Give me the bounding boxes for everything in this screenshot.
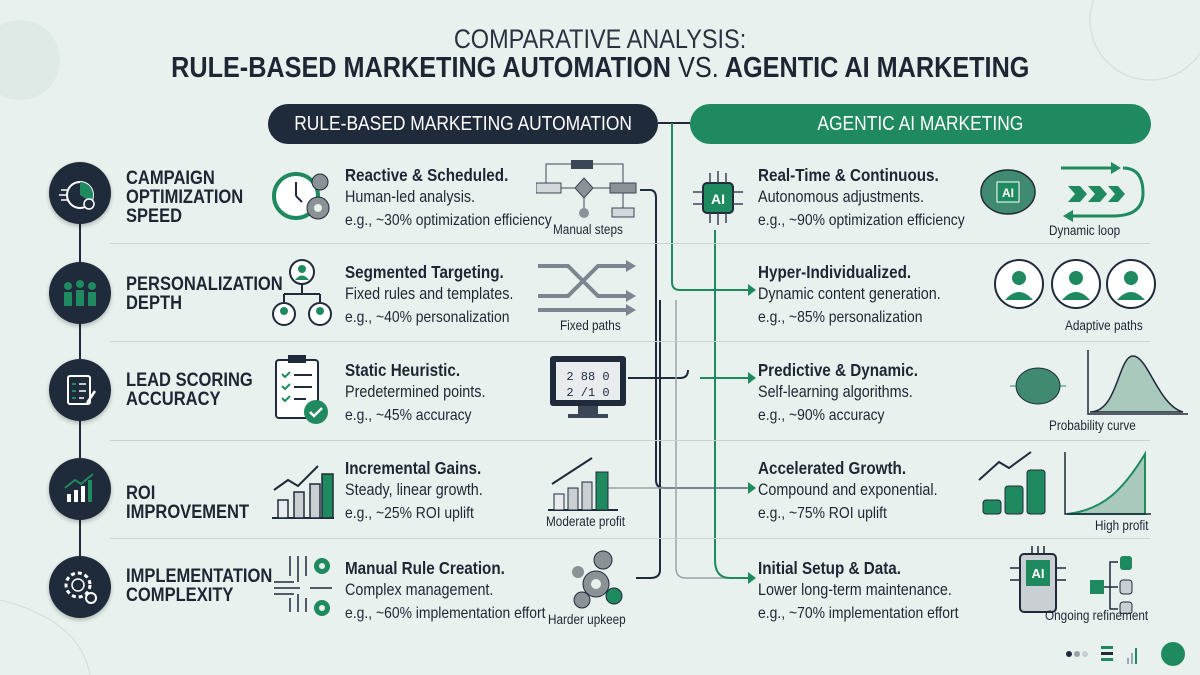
text: agentic	[758, 262, 941, 326]
icon: dynamic loop: Dynamic loop	[1049, 223, 1120, 238]
icon: gear circle	[49, 556, 111, 618]
text: agentic: Lower long-term maintenance.	[758, 581, 952, 599]
text: agentic: Dynamic content generation.	[758, 285, 941, 303]
text: rule-based: Reactive & Scheduled.	[345, 165, 508, 185]
icon: checklist	[275, 355, 328, 424]
text: agentic	[758, 558, 959, 622]
text: rule-based: e.g., ~25% ROI uplift	[345, 505, 474, 522]
text: agentic: e.g., ~70% implementation effort	[758, 605, 959, 622]
text: rule-based: e.g., ~40% personalization	[345, 309, 509, 326]
text: rule-based	[345, 165, 552, 229]
row 4: ROI improvement	[46, 450, 1151, 533]
label	[126, 370, 253, 410]
icon: fixed paths	[538, 260, 636, 333]
icon: adaptive paths	[994, 259, 1156, 333]
label: ROI	[126, 483, 155, 504]
text: rule-based: Complex management.	[345, 581, 493, 599]
icon: fixed paths: Fixed paths	[560, 318, 621, 333]
icon: clipboard circle	[49, 359, 111, 421]
text: rule-based: Static Heuristic.	[345, 360, 460, 380]
text: agentic	[758, 360, 918, 424]
label: ACCURACY	[126, 389, 221, 410]
icon: AI chip	[693, 171, 743, 225]
text: agentic: e.g., ~90% accuracy	[758, 407, 885, 424]
text: agentic: Predictive & Dynamic.	[758, 360, 918, 380]
row 3: lead scoring accuracy	[46, 350, 1188, 433]
icon: stopwatch circle	[49, 162, 111, 224]
text: rule-based: e.g., ~60% implementation effort	[345, 605, 546, 622]
text: agentic: e.g., ~90% optimization efficiency	[758, 212, 965, 229]
header: rule-based	[268, 104, 658, 144]
label: IMPROVEMENT	[126, 502, 249, 523]
title: COMPARATIVE ANALYSIS:	[454, 24, 746, 54]
text: rule-based	[345, 262, 513, 326]
icon: growth chart circle	[49, 458, 111, 520]
icon: AI machine + refinement: AI	[1032, 566, 1044, 581]
label: SPEED	[126, 206, 182, 227]
label	[126, 483, 249, 523]
text: agentic	[758, 165, 965, 229]
text: rule-based: Incremental Gains.	[345, 458, 481, 478]
icon: clock gears	[272, 172, 330, 220]
text: agentic: Self-learning algorithms.	[758, 383, 913, 401]
row 2: personalization depth	[46, 259, 1156, 333]
icon: circuit gears	[274, 556, 332, 616]
icon: dynamic loop	[980, 162, 1144, 238]
icon: monitor: 2 /1 0	[566, 386, 610, 400]
label: LEAD SCORING	[126, 370, 253, 391]
text: rule-based	[345, 558, 546, 622]
text: agentic: Compound and exponential.	[758, 481, 938, 499]
icon: flowchart	[536, 160, 636, 237]
label: CAMPAIGN	[126, 168, 215, 189]
icon: AI machine + refinement: Ongoing refinement	[1045, 608, 1148, 623]
text: rule-based: Steady, linear growth.	[345, 481, 483, 499]
text: rule-based: e.g., ~30% optimization efficiency	[345, 212, 552, 229]
text: rule-based: Predetermined points.	[345, 383, 485, 401]
text: agentic: e.g., ~75% ROI uplift	[758, 505, 887, 522]
text: agentic: Real-Time & Continuous.	[758, 165, 939, 185]
row 5: implementation complexity	[46, 546, 1148, 627]
text: rule-based: Manual Rule Creation.	[345, 558, 505, 578]
icon: bar growth	[272, 465, 334, 519]
icon: probability curve: Probability curve	[1049, 418, 1136, 433]
icon: probability curve	[1010, 350, 1188, 433]
label: PERSONALIZATION	[126, 274, 283, 295]
label: COMPLEXITY	[126, 585, 233, 606]
text: rule-based: Fixed rules and templates.	[345, 285, 513, 303]
text: agentic	[758, 458, 938, 522]
text: agentic: Accelerated Growth.	[758, 458, 906, 478]
icon: high profit: High profit	[1095, 518, 1149, 533]
text: agentic: e.g., ~85% personalization	[758, 309, 922, 326]
text: agentic: Initial Setup & Data.	[758, 558, 901, 578]
icon: monitor: 2 88 0	[566, 370, 610, 384]
icon: AI chip: AI	[711, 191, 725, 207]
label: DEPTH	[126, 293, 182, 314]
title: RULE-BASED MARKETING AUTOMATION VS. AGENTIC AI MARKETING	[171, 52, 1029, 84]
text: rule-based: Human-led analysis.	[345, 188, 475, 206]
label: IMPLEMENTATION	[126, 566, 272, 587]
footer icons	[1066, 642, 1185, 666]
text: agentic: Hyper-Individualized.	[758, 262, 911, 282]
label	[126, 168, 243, 227]
icon: high profit	[978, 450, 1151, 533]
title	[171, 24, 1029, 84]
icon: monitor	[550, 356, 626, 418]
icon: gears	[548, 550, 626, 627]
text: agentic: Autonomous adjustments.	[758, 188, 924, 206]
text: rule-based	[345, 360, 485, 424]
text: rule-based: e.g., ~45% accuracy	[345, 407, 472, 424]
row 1: campaign optimization speed	[46, 160, 1144, 238]
dividers	[110, 243, 1150, 244]
label: OPTIMIZATION	[126, 187, 243, 208]
header: rule-based: RULE-BASED MARKETING AUTOMATION	[294, 113, 632, 135]
text: rule-based	[345, 458, 483, 522]
label	[126, 274, 283, 314]
icon: segmented people	[272, 259, 332, 326]
label	[126, 566, 272, 606]
icon: adaptive paths: Adaptive paths	[1065, 318, 1143, 333]
text: rule-based: Segmented Targeting.	[345, 262, 504, 282]
icon: people circle	[49, 262, 111, 324]
icon: flowchart: Manual steps	[553, 222, 623, 237]
header: agentic: AGENTIC AI MARKETING	[818, 113, 1023, 135]
icon: moderate profit	[546, 457, 625, 529]
icon: AI machine + refinement	[1010, 546, 1148, 623]
header: agentic	[690, 104, 1151, 144]
icon: dynamic loop: AI	[1002, 186, 1014, 200]
icon: moderate profit: Moderate profit	[546, 514, 625, 529]
icon: gears: Harder upkeep	[548, 612, 626, 627]
